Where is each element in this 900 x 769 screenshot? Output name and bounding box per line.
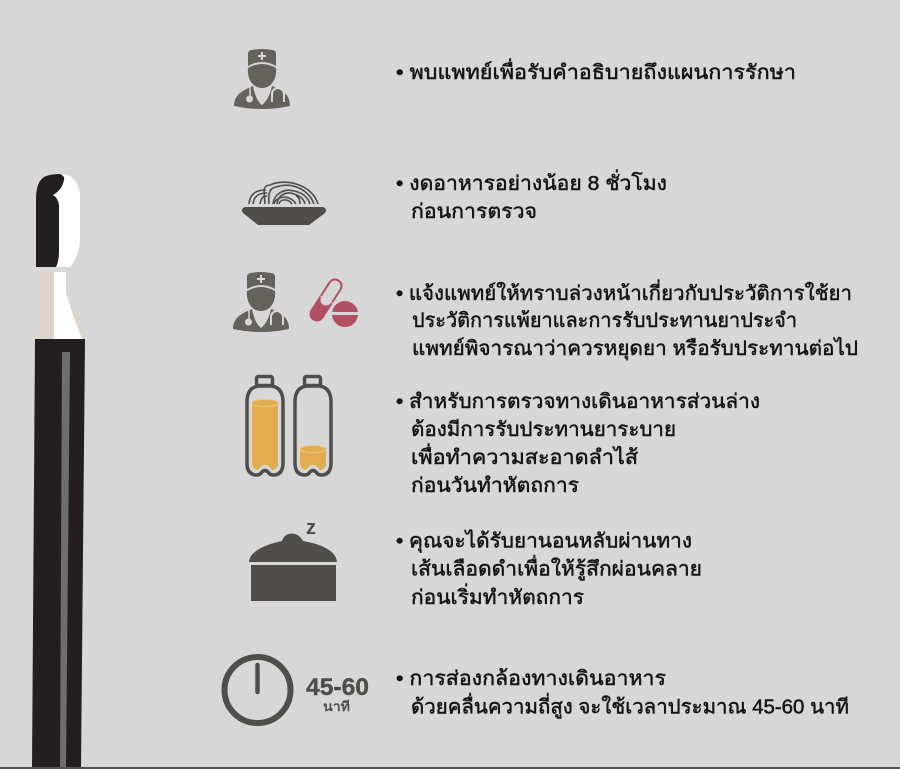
text: procedure duration: • การส่องกล้องทางเดินอาหาร — [396, 668, 666, 690]
icon: doctor — [234, 49, 290, 109]
text: medication history: แพทย์พิจารณาว่าควรหยุดยา หรือรับประทานต่อไป — [412, 337, 858, 361]
text: sedation — [396, 530, 702, 609]
text: laxative preparation: • สำหรับการตรวจทางเดินอาหารส่วนล่าง — [396, 391, 760, 413]
icon: sleeping under blanket: z — [306, 517, 316, 539]
text: sedation: ก่อนเริ่มทำหัตถการ — [411, 583, 584, 609]
text: laxative preparation: ต้องมีการรับประทานยาระบาย — [411, 419, 676, 441]
text: sedation: เส้นเลือดดำเพื่อให้รู้สึกผ่อนคลาย — [411, 554, 702, 582]
text: laxative preparation — [396, 391, 760, 497]
text: procedure duration — [396, 668, 849, 720]
text: fasting: ก่อนการตรวจ — [411, 201, 537, 223]
text: sedation: • คุณจะได้รับยานอนหลับผ่านทาง — [396, 530, 692, 554]
text: see doctor: • พบแพทย์เพื่อรับคำอธิบายถึงแผนการรักษา — [396, 58, 796, 84]
icon: two bottles — [247, 376, 331, 475]
text: laxative preparation: ก่อนวันทำหัตถการ — [411, 475, 579, 497]
text: fasting: • งดอาหารอย่างน้อย 8 ชั่วโมง — [396, 169, 667, 195]
icon: clock with duration: 45-60 — [306, 674, 369, 701]
icon: bowl of noodles — [242, 182, 326, 225]
text: medication history — [396, 279, 858, 361]
text: procedure duration: ด้วยคลื่นความถี่สูง จะใช้เวลาประมาณ 45-60 นาที — [411, 692, 849, 720]
icon: clock with duration — [224, 657, 369, 723]
icon: doctor with medication — [233, 272, 359, 332]
icon: sleeping under blanket — [249, 517, 337, 601]
icon: doctor — [233, 272, 289, 332]
text: laxative preparation: เพื่อทำความสะอาดลำไส้ — [411, 443, 638, 469]
icon: capsule and pill — [317, 286, 359, 328]
icon: clock with duration: นาที — [323, 699, 350, 714]
text: medication history: • แจ้งแพทย์ให้ทราบล่วงหน้าเกี่ยวกับประวัติการใช้ยา — [396, 279, 852, 305]
text: medication history: ประวัติการแพ้ยาและการรับประทานยาประจำ — [412, 310, 797, 332]
illustration: endoscope — [32, 174, 85, 767]
text: fasting — [396, 169, 667, 223]
